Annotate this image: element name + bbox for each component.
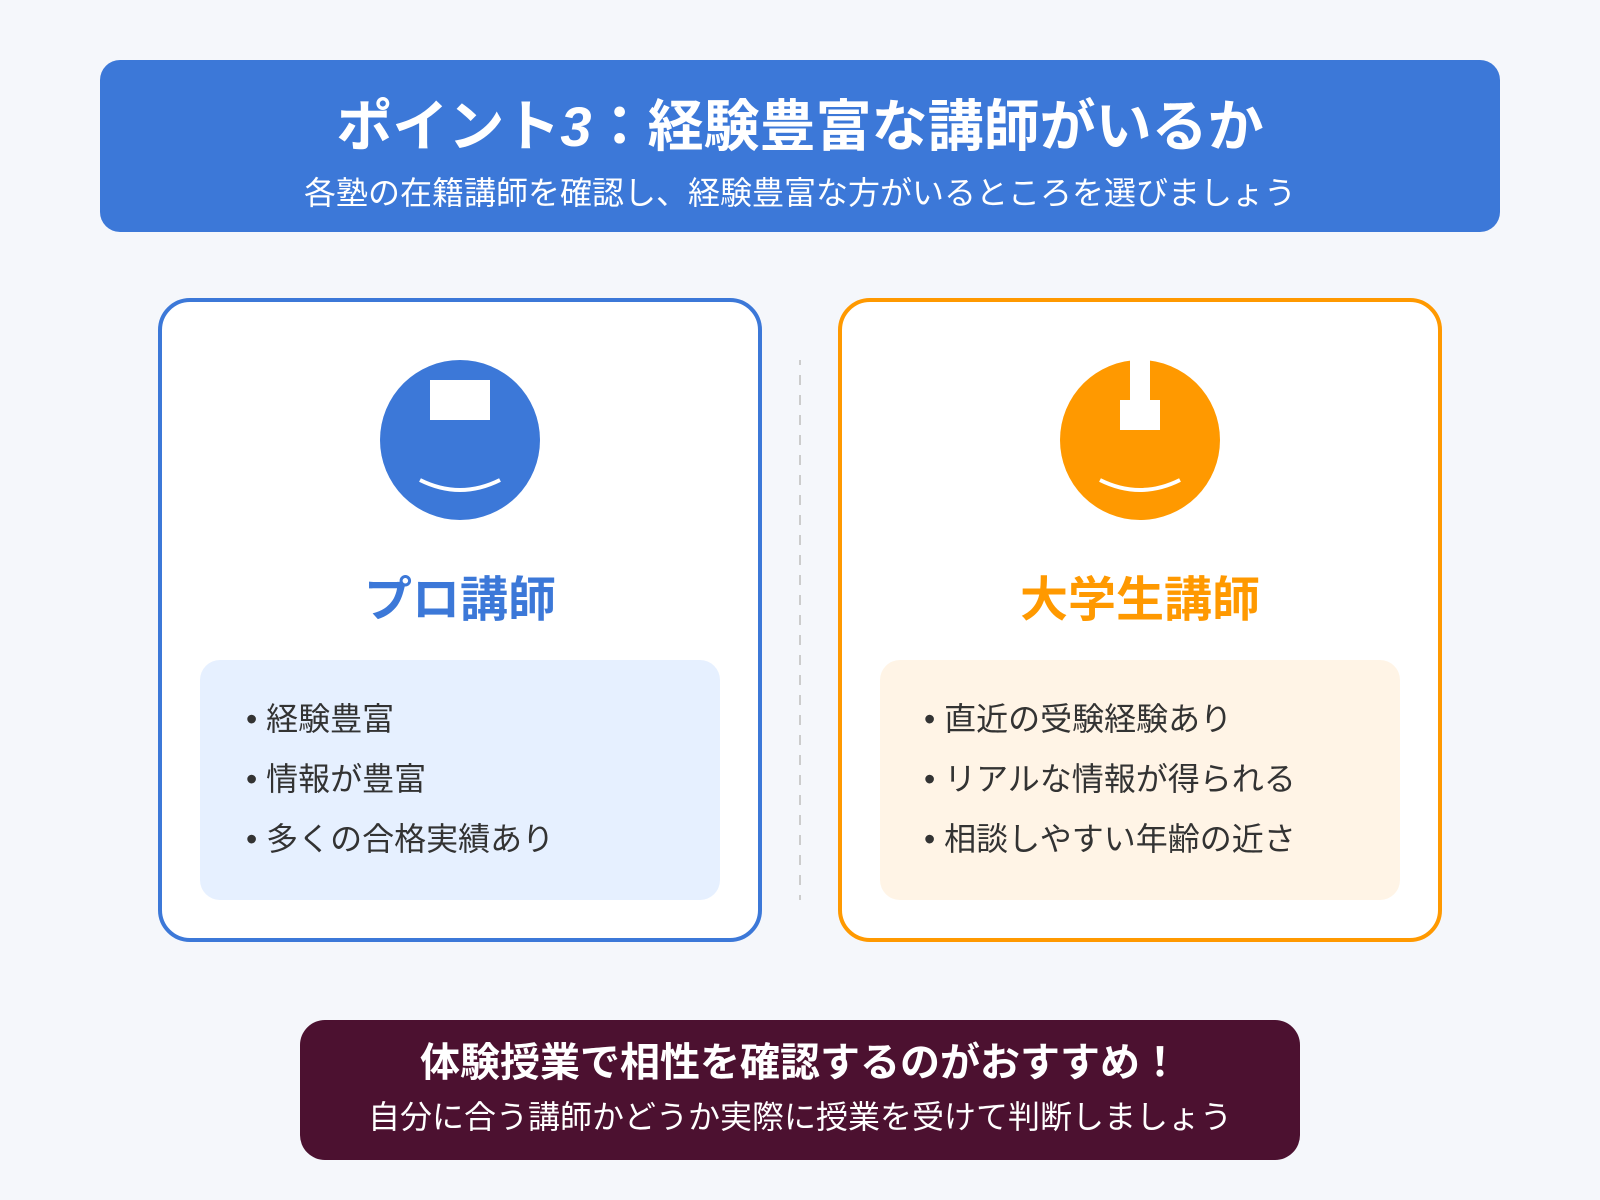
icon: student teacher face	[1060, 355, 1220, 520]
callout: trial lesson	[300, 1020, 1300, 1160]
title: ポイント3：経験豊富な講師がいるか	[336, 95, 1264, 158]
panel: university student teacher	[840, 300, 1440, 940]
callout heading: 体験授業で相性を確認するのがおすすめ！	[420, 1041, 1180, 1085]
icon: professional teacher face	[380, 360, 540, 520]
callout text: 自分に合う講師かどうか実際に授業を受けて判断しましょう	[368, 1099, 1232, 1135]
header banner	[100, 60, 1500, 232]
center divider	[799, 360, 801, 900]
list: professional teacher features: • 経験豊富	[246, 701, 394, 737]
list: student teacher features: • 直近の受験経験あり	[924, 701, 1232, 737]
heading: professional teacher: プロ講師	[364, 574, 556, 627]
list: professional teacher features	[200, 660, 720, 900]
heading: student teacher: 大学生講師	[1020, 574, 1260, 627]
list: professional teacher features: • 多くの合格実績あり	[246, 821, 554, 857]
list: student teacher features: • 相談しやすい年齢の近さ	[924, 821, 1296, 857]
list: student teacher features: • リアルな情報が得られる	[924, 761, 1296, 797]
panel: professional teacher	[160, 300, 760, 940]
list: professional teacher features: • 情報が豊富	[246, 761, 426, 797]
subtitle: 各塾の在籍講師を確認し、経験豊富な方がいるところを選びましょう	[304, 175, 1296, 211]
list: student teacher features	[880, 660, 1400, 900]
